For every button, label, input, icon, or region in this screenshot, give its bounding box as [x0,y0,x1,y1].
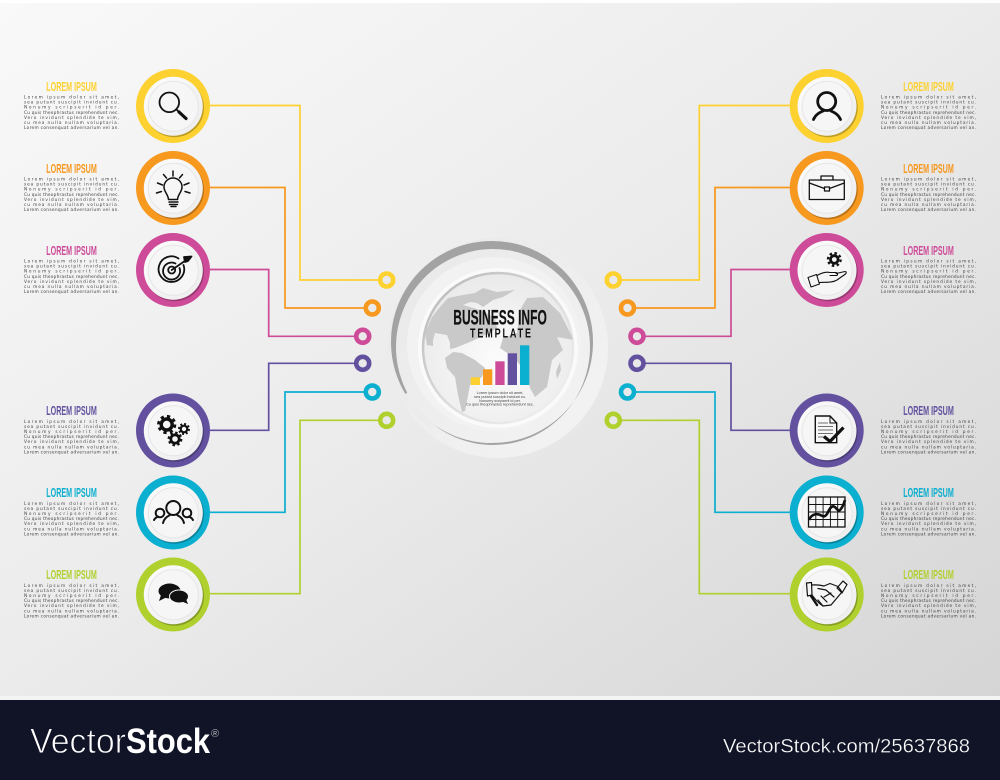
connector: purple right [630,357,795,430]
text block: Nonumy scripserit id per. [24,269,119,275]
panel: settings [24,394,210,468]
text block: Cu quis theophrastus reprehendunt nec. [24,110,119,116]
text block: Cu quis theophrastus reprehendunt nec. [24,516,119,522]
central caption: Cu quis theophrastus reprehendunt nec. [466,403,534,407]
heading: LOREM IPSUM [903,80,954,94]
badge [790,69,864,143]
text block: Lorem ipsum dolor sit amet, [24,501,119,507]
text block: Cu quis theophrastus reprehendunt nec. [24,192,119,198]
text block: Lorem ipsum dolor sit amet, [24,258,119,264]
text block: cu mea nulla nullam voluptaria. [881,444,976,450]
panel: profile [790,69,976,143]
text block: Lorem consenquat adversarium vel an. [24,289,119,295]
text block: Vero invidunt splendide te vim, [881,279,976,285]
badge [790,558,864,632]
panel: chat [24,558,210,632]
panel: search [24,69,210,143]
text block: Lorem ipsum dolor sit amet, [881,176,976,182]
badge [790,394,864,468]
text block: cu mea nulla nullam voluptaria. [881,284,976,290]
text block: cu mea nulla nullam voluptaria. [24,526,119,532]
text block: Lorem consenquat adversarium vel an. [881,207,976,213]
text block: cu mea nulla nullam voluptaria. [24,608,119,614]
badge [136,233,210,307]
central caption: Lorem ipsum dolor sit amet, [477,391,523,395]
text block [881,501,976,537]
logo wordmark: ® [211,728,219,740]
icon: gears [158,416,189,445]
text block [24,94,119,131]
icon: handshake [806,581,847,606]
text block: Lorem ipsum dolor sit amet, [24,583,119,589]
badge [136,476,210,550]
text block: Lorem consenquat adversarium vel an. [24,125,119,131]
text block: Vero invidunt splendide te vim, [24,521,119,527]
heading: LOREM IPSUM [903,162,954,176]
text block: Cu quis theophrastus reprehendunt nec. [881,434,976,440]
text block: Lorem consenquat adversarium vel an. [881,531,976,537]
panel: document [790,394,976,468]
icon: hand with gear [808,253,846,287]
subtitle: TEMPLATE [470,327,531,341]
world map [425,288,574,412]
text block: Lorem consenquat adversarium vel an. [881,613,976,619]
badge [136,394,210,468]
text block: Nonumy scripserit id per. [881,511,976,517]
text block: Nonumy scripserit id per. [24,429,119,435]
text block: Vero invidunt splendide te vim, [24,439,119,445]
icon: target [159,256,192,282]
text block: Nonumy scripserit id per. [24,105,119,111]
heading: LOREM IPSUM [903,404,954,418]
text block: sea putant suscipit invidunt cu. [24,424,119,430]
text block: cu mea nulla nullam voluptaria. [881,526,976,532]
text block: Lorem consenquat adversarium vel an. [24,531,119,537]
panel: briefcase [790,151,976,225]
badge [790,476,864,550]
text block: Cu quis theophrastus reprehendunt nec. [881,192,976,198]
text block: Vero invidunt splendide te vim, [881,603,976,609]
text block: Vero invidunt splendide te vim, [24,197,119,203]
logo wordmark [30,722,219,761]
text block: sea putant suscipit invidunt cu. [24,264,119,270]
text block: sea putant suscipit invidunt cu. [24,506,119,512]
text block: Lorem ipsum dolor sit amet, [24,94,119,100]
heading: LOREM IPSUM [46,244,97,258]
icon: briefcase [809,176,844,200]
bar chart [471,345,529,385]
text block: sea putant suscipit invidunt cu. [881,506,976,512]
text block: Lorem consenquat adversarium vel an. [881,289,976,295]
text block: Cu quis theophrastus reprehendunt nec. [24,274,119,280]
icon: people [154,501,193,523]
text block: Vero invidunt splendide te vim, [881,115,976,121]
connector: cyan right [621,386,795,512]
text block: sea putant suscipit invidunt cu. [24,100,119,106]
central globe [388,238,608,458]
text block [24,501,119,537]
text block: Nonumy scripserit id per. [881,187,976,193]
text block: Lorem ipsum dolor sit amet, [881,583,976,589]
badge [136,69,210,143]
connector: green left [205,414,393,594]
text block: sea putant suscipit invidunt cu. [881,100,976,106]
text block: cu mea nulla nullam voluptaria. [24,284,119,290]
heading: LOREM IPSUM [903,568,954,582]
text block: Lorem ipsum dolor sit amet, [881,258,976,264]
connector: yellow left [205,106,393,286]
panel: idea [24,151,210,225]
text block: Cu quis theophrastus reprehendunt nec. [881,274,976,280]
heading: LOREM IPSUM [903,486,954,500]
text block: Nonumy scripserit id per. [881,429,976,435]
panel: growth chart [790,476,976,550]
badge [136,558,210,632]
text block: Nonumy scripserit id per. [24,593,119,599]
text block: Cu quis theophrastus reprehendunt nec. [881,598,976,604]
icon: light bulb [156,171,190,206]
image id: VectorStock.com/25637868 [723,736,970,758]
heading: LOREM IPSUM [46,404,97,418]
text block: Nonumy scripserit id per. [24,187,119,193]
logo wordmark: Stock [126,722,210,761]
connector: orange left [205,188,379,314]
heading: LOREM IPSUM [46,486,97,500]
text block: Vero invidunt splendide te vim, [881,521,976,527]
text block: Lorem consenquat adversarium vel an. [24,613,119,619]
badge [790,233,864,307]
icon: person [814,92,840,120]
text block: cu mea nulla nullam voluptaria. [24,444,119,450]
connector: cyan left [205,386,379,512]
icon: line chart on grid [808,497,845,527]
text block [24,176,119,213]
text block: Lorem consenquat adversarium vel an. [881,125,976,131]
heading: LOREM IPSUM [46,568,97,582]
text block: cu mea nulla nullam voluptaria. [881,202,976,208]
text block: Vero invidunt splendide te vim, [24,115,119,121]
connector: green right [607,414,795,594]
icon: magnifier [160,92,186,118]
text block: sea putant suscipit invidunt cu. [881,424,976,430]
title: BUSINESS INFO [453,306,547,330]
text block: Lorem consenquat adversarium vel an. [24,207,119,213]
text block: Lorem ipsum dolor sit amet, [881,501,976,507]
heading: LOREM IPSUM [46,162,97,176]
text block: sea putant suscipit invidunt cu. [881,182,976,188]
logo wordmark: Vector [30,722,126,761]
text block [24,583,119,619]
text block: Nonumy scripserit id per. [881,269,976,275]
central caption [466,391,534,407]
icon: speech bubbles [158,584,188,604]
text block [881,258,976,295]
text block [881,94,976,131]
heading: LOREM IPSUM [903,244,954,258]
text block [881,419,976,455]
text block: Vero invidunt splendide te vim, [881,197,976,203]
text block: Cu quis theophrastus reprehendunt nec. [24,598,119,604]
text block: Vero invidunt splendide te vim, [881,439,976,445]
text block: Cu quis theophrastus reprehendunt nec. [24,434,119,440]
connector: yellow right [607,106,795,286]
text block [881,176,976,213]
panel: helping hand [790,233,976,307]
central caption: Nonumy scripserit id per. [479,399,521,403]
text block: Nonumy scripserit id per. [881,105,976,111]
text block: cu mea nulla nullam voluptaria. [881,120,976,126]
connector: orange right [621,188,795,314]
text block [881,583,976,619]
text block: Lorem ipsum dolor sit amet, [881,419,976,425]
text block: Cu quis theophrastus reprehendunt nec. [881,110,976,116]
text block: Nonumy scripserit id per. [24,511,119,517]
central caption: sea putant suscipit invidunt cu. [474,395,526,399]
badge [790,151,864,225]
text block: Nonumy scripserit id per. [881,593,976,599]
text block: Lorem ipsum dolor sit amet, [24,419,119,425]
text block: Cu quis theophrastus reprehendunt nec. [881,516,976,522]
icon: document with check [815,416,844,443]
heading: LOREM IPSUM [46,80,97,94]
connector: magenta right [630,270,795,343]
text block: Vero invidunt splendide te vim, [24,279,119,285]
connector: purple left [205,357,369,430]
panel: handshake [790,558,976,632]
connector: magenta left [205,270,369,343]
text block: cu mea nulla nullam voluptaria. [881,608,976,614]
text block: cu mea nulla nullam voluptaria. [24,202,119,208]
footer bar [0,696,1000,780]
text block: sea putant suscipit invidunt cu. [881,588,976,594]
text block: Lorem ipsum dolor sit amet, [881,94,976,100]
panel: team [24,476,210,550]
badge [136,151,210,225]
text block: Lorem ipsum dolor sit amet, [24,176,119,182]
text block: Lorem consenquat adversarium vel an. [881,449,976,455]
text block: Lorem consenquat adversarium vel an. [24,449,119,455]
text block [24,419,119,455]
text block: sea putant suscipit invidunt cu. [24,182,119,188]
text block: sea putant suscipit invidunt cu. [881,264,976,270]
text block: cu mea nulla nullam voluptaria. [24,120,119,126]
text block: Vero invidunt splendide te vim, [24,603,119,609]
text block [24,258,119,295]
text block: sea putant suscipit invidunt cu. [24,588,119,594]
panel: target [24,233,210,307]
